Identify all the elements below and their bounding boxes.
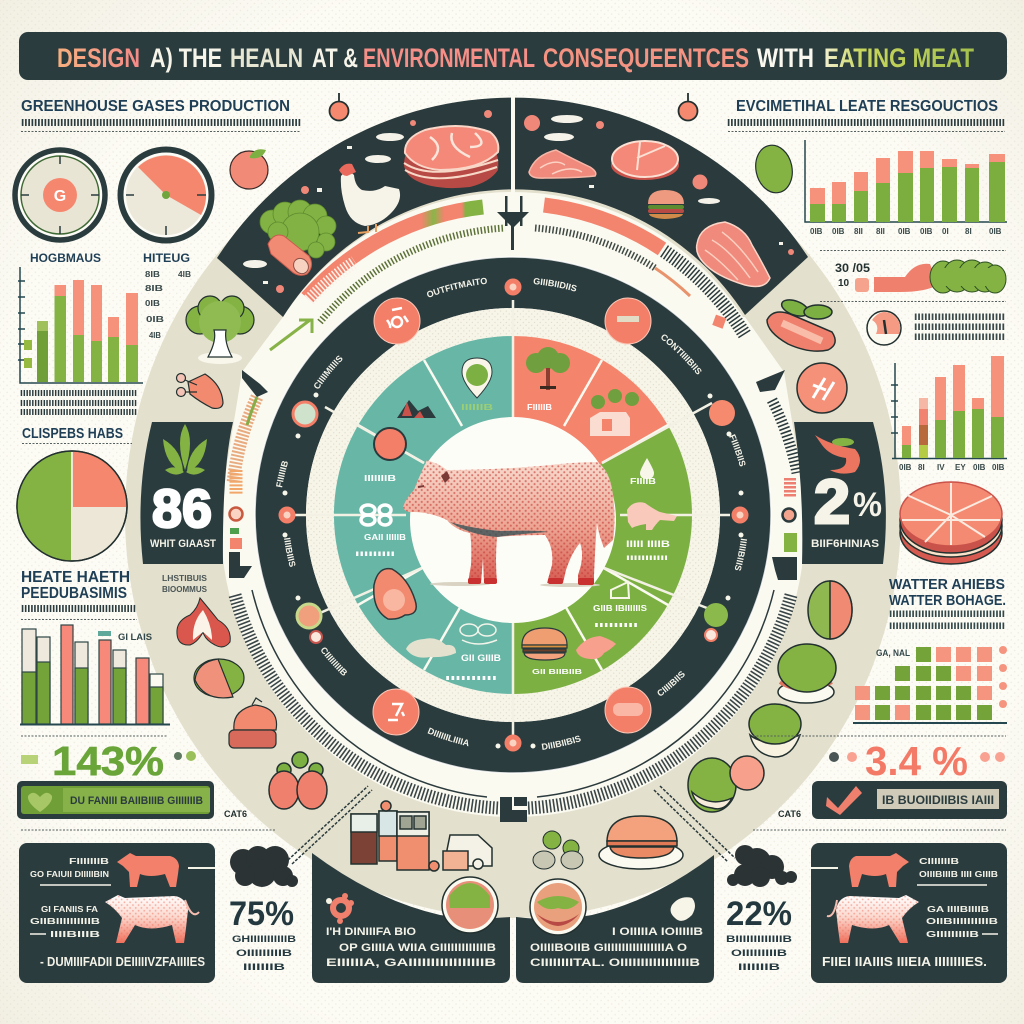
icon: large salmon cut <box>697 222 770 286</box>
ring curved labels: GIIIBIIDIIS <box>534 278 577 292</box>
bar chart: environmental: 0IB <box>898 227 911 236</box>
gauge left: G <box>54 188 66 205</box>
pie chart <box>16 451 127 561</box>
callout: green bar: DU FANIII BAIIBIIIB GIIIIIIIB <box>70 795 203 807</box>
wedge labels <box>355 403 671 682</box>
icon: map pin <box>462 358 492 398</box>
bar chart: foodmaus <box>18 267 143 383</box>
ring curved labels: IIIIIBIIIS <box>735 538 747 571</box>
ring curved labels: OUTFITMAITO <box>427 278 487 298</box>
icon: bottles and cartons <box>351 801 439 871</box>
icon: flames <box>177 598 230 647</box>
stat column: 75%: 75% <box>229 895 294 933</box>
ring curved labels: DIIIBIIBIS <box>542 736 581 750</box>
icon: water drop <box>640 458 654 479</box>
heading: health <box>21 569 137 620</box>
wedge labels: IIIIIIIII <box>594 623 640 629</box>
title bar <box>19 32 1007 80</box>
panel: bottom centre left: EIIIIIIA, GAIIIIIIIIIIIIIIIIIB <box>326 957 496 969</box>
panel: bottom left cows <box>19 843 215 983</box>
cream ring <box>320 322 706 708</box>
wedge labels: GIIB IBIIIIIIS <box>593 604 648 613</box>
section: greenhouse gases production <box>21 98 301 132</box>
panel: bottom centre right: I OIIIIIA IOIIIIIB <box>612 926 703 938</box>
stat: 3.4%: 3.4 % <box>865 738 968 784</box>
icon: heart check <box>28 793 52 812</box>
bar chart: land <box>891 356 1007 472</box>
gauge left <box>15 150 105 240</box>
icon: green bean <box>751 142 797 196</box>
bar chart: land: 0IB <box>899 463 912 472</box>
heading: water: IIIIIIIIIIIIIIIIIIIIIIIIIIIIIIIIIIII <box>889 609 1005 619</box>
title bar: A) THE <box>150 43 222 73</box>
bar chart: health <box>20 625 170 724</box>
icon: half lettuce <box>808 581 852 639</box>
heading: health: IIIIIIIIIIIIIIIIIIIIIIIIIIIIIIIIIIIII <box>21 604 136 615</box>
wedge labels: GII GIIIB <box>461 653 502 663</box>
stat: 3.4% <box>829 738 1005 784</box>
icon: cow small <box>117 853 179 887</box>
chart label <box>98 631 152 642</box>
stat: 143%: 143% <box>52 738 164 784</box>
icon: marker pin left <box>330 93 348 120</box>
connector markers: left <box>229 370 268 578</box>
bar chart: environmental <box>805 140 1007 236</box>
panel: right stat 2%: 2 <box>814 468 850 537</box>
ring curved labels <box>276 278 747 750</box>
heading: environmental <box>727 98 1005 132</box>
dark ring <box>255 257 771 773</box>
stat column: 20%: BIIIIIIIIIIIIIB <box>726 934 793 944</box>
large ring nodes <box>373 298 651 735</box>
panel: bottom right cows: FIIEI IIAIIIS IIIEIA IIIIIIIIES. <box>822 954 987 969</box>
panel: bottom left cows: GO FAIUII DIIIIIBIN <box>30 870 109 879</box>
panel: bottom left cows: - DUMIIIFADII DEIIIIIVZFAIIIIES <box>40 954 205 969</box>
chart legend: 0IB <box>146 315 164 324</box>
heading: health: HEATE HAETH <box>21 569 130 586</box>
chart label: GI LAIS <box>118 632 152 642</box>
ring curved labels: CIIIIBIIS <box>658 671 685 696</box>
panel: bottom left cows: FIIIIIIIB <box>69 857 109 866</box>
panel: top dark arc band <box>217 95 808 317</box>
icon: hot dog <box>767 297 835 351</box>
title bar: WITH <box>757 43 814 73</box>
gauge labels: HOGBMAUS <box>30 251 101 265</box>
chart caption: IIIIIIIIIIIIIIIIIIIIIIIIIIIIIIIIIIIIIIIII <box>20 408 137 417</box>
panel: bottom centre right <box>516 855 714 983</box>
panel: bottom centre left: I'H DINIIIFA BIO <box>326 926 416 938</box>
wedge labels: GII BIIBIIB <box>532 669 582 676</box>
icon: outline food <box>460 624 497 644</box>
ring nodes <box>281 281 746 749</box>
icon: truck <box>443 835 492 870</box>
panel: right stat 2%: BIIF6HINIAS <box>811 538 879 550</box>
bar chart: land: 0IB <box>973 463 986 472</box>
small label above flames: BIOOMMUS <box>162 585 208 594</box>
ring curved labels: CIIIIIIIIIB <box>321 648 347 676</box>
panel: left stat 86: 86 <box>152 479 212 539</box>
chart: central wedge ring <box>295 300 730 735</box>
icon: dark smoke cloud <box>230 846 298 887</box>
inner white circle <box>410 417 616 623</box>
icon: leaf <box>163 424 207 475</box>
bar chart: environmental: 0IB <box>832 227 845 236</box>
wedge content: labels and icons <box>355 347 677 682</box>
icon: pattern knot <box>361 505 391 525</box>
bar chart: environmental: 0IB <box>920 227 933 236</box>
clouds and crumbs <box>243 115 783 284</box>
panel: bottom right cows: OIIIBIIIB IIII GIIIB <box>919 870 998 879</box>
icon: tomato and meat <box>229 698 277 748</box>
stat column: 20%: OIIIIIIIIIB <box>731 948 788 958</box>
icon: cow small <box>849 853 909 887</box>
icon: cow large <box>105 895 199 943</box>
outer hatched gauge rings <box>233 397 797 808</box>
heading: water <box>889 576 1006 631</box>
chart caption: IIIIIIIIIIIIIIIIIIIIIIIIIIIIIIIIIIIIIIIII <box>20 399 137 408</box>
heading: environmental: EVCIMETIHAL LEATE RESGOUCTIOS <box>736 98 998 115</box>
bar chart: environmental: 8I <box>965 227 972 236</box>
title bar: ENVIRONMENTAL <box>363 43 535 73</box>
icon: veggie pods <box>533 831 583 869</box>
icon: chicken <box>339 164 400 233</box>
panel: right stat 2% <box>794 422 886 564</box>
icon: large burger on plate <box>599 816 683 869</box>
axis nodes <box>281 281 746 749</box>
icon: cloud pile <box>406 638 456 658</box>
small label above flames: LHSTIBUIS <box>162 574 208 583</box>
icon: tree <box>526 347 570 390</box>
panel: bottom centre right: CIIIIIIIITAL. OIIIIIIIIIIIIIIIIIB <box>530 957 700 969</box>
gauge labels <box>30 251 190 265</box>
panel: bottom left cows: GIIBIIIIIIIIIIB <box>30 917 100 926</box>
wedge labels: IIIIIIIIII <box>445 676 499 682</box>
grid chart: water: GA, NAL <box>876 648 910 658</box>
callout: dark bar <box>812 781 1007 819</box>
text block: figure caption: IIIIIIIIIIIIIIIIIIIIIIIIIII <box>914 332 1005 342</box>
icon: check mark <box>826 786 862 815</box>
chart legend: 8IB <box>145 270 160 279</box>
bar chart: environmental: 0I <box>942 227 949 236</box>
icon: chicken thigh <box>374 569 416 619</box>
stat column: 75% <box>229 846 298 972</box>
beige backdrop circle <box>125 112 901 918</box>
icon: burger <box>522 628 567 660</box>
panel: left stat 86: WHIT GIAAST <box>150 538 216 550</box>
icon: half salad <box>194 659 244 698</box>
heading: environmental: IIIIIIIIIIIIIIIIIIIIIIIIIIIIIIIIIIIIIIIIIIIIIIIIIIIIIIIIIIIIIIIIIIIIIIIIIIIIIIIIIIIIII <box>727 118 1005 129</box>
panel: bottom right cows: CIIIIIIIB <box>919 857 959 866</box>
arrow: smoke connector left <box>288 786 372 864</box>
panel: bottom right cows: GIIIIIIIIIB <box>926 930 979 939</box>
icon: chili <box>815 435 860 474</box>
stat column: 75%: GHIIIIIIIIIIIB <box>232 934 297 944</box>
icon: steak stack <box>404 126 498 188</box>
stat column: 75%: OIIIIIIIIIB <box>236 948 293 958</box>
icon: tomatoes with leaf <box>269 752 327 809</box>
ring curved labels: CONTIIIIBIIS <box>661 334 702 374</box>
wedge labels: FIIIIB <box>630 477 656 486</box>
gauge labels: HITEUG <box>143 251 190 265</box>
bar chart: environmental: 8II <box>854 227 863 236</box>
icon: broccoli <box>186 296 254 364</box>
section: greenhouse gases production: IIIIIIIIIIIIIIIIIIIIIIIIIIIIIIIIIIIIIIIIIIIIIIIIIIIIIIIIIIIIIIIIIIIIIIIIIIIIIIIIIIIIII <box>21 118 301 129</box>
title bar: EATING MEAT <box>824 43 974 73</box>
stat column: 75%: IIIIIIIB <box>243 962 286 972</box>
panel: right stat 2%: % <box>853 486 882 524</box>
chart caption <box>20 389 137 417</box>
chart caption: IIIIIIIIIIIIIIIIIIIIIIIIIIIIIIIIIIIIIIIII <box>20 389 137 398</box>
small note: CAT6 <box>778 809 801 819</box>
icon: mountain of food <box>397 400 436 418</box>
icon: central arrow marker <box>497 196 529 250</box>
icon: salmon circle <box>797 363 847 413</box>
icon: meat slices <box>576 636 616 659</box>
ring white dots <box>282 392 744 748</box>
small note: CAT6 <box>224 809 247 819</box>
grid chart: water <box>853 646 1007 723</box>
icon: white splat <box>671 897 695 921</box>
panel: bottom centre left: OP GIIIIA WIIA GIIIIIIIIIIIIIB <box>339 942 496 954</box>
icon: upper-right square marker <box>712 315 726 329</box>
panel: bottom centre left <box>312 853 510 983</box>
text block: figure caption: IIIIIIIIIIIIIIIIIIIIIIIIIII <box>914 322 1005 332</box>
icon: lettuce on plate <box>778 644 836 703</box>
icon: apple <box>230 149 268 189</box>
wedge labels: IIIIIIIIIII <box>626 556 669 562</box>
chart legend: 4IB <box>178 270 191 279</box>
side food icons: right <box>533 142 852 869</box>
icon: lettuce on burger <box>749 704 801 757</box>
icon: small burger <box>648 190 684 219</box>
inner cream disc <box>221 192 805 817</box>
ring curved labels: DIIIIIILIIIIA <box>428 728 468 746</box>
icon: circle figure <box>867 311 901 345</box>
chart legend: 0IB <box>145 299 160 308</box>
arrow: smoke connector right <box>654 786 735 862</box>
bar chart: land: 8I <box>918 463 925 472</box>
icon: chicken legs <box>176 374 223 408</box>
icon: salmon slice <box>529 150 596 178</box>
bar chart: land: EY <box>955 463 966 472</box>
panel: bottom right cows <box>811 843 1007 983</box>
wedge labels: IIIIIIB <box>461 403 493 412</box>
wedge labels: FIIIIIB <box>527 403 552 412</box>
icon: gear <box>326 893 354 924</box>
title bar: AT & <box>312 43 358 73</box>
top food icons <box>243 110 794 293</box>
centre bottom marker <box>500 797 527 822</box>
wedge labels: IIIIIIIII <box>355 552 396 558</box>
stat column: 20%: IIIIIIIB <box>738 962 781 972</box>
panel: bottom right cows: OIIBIIIIIIIIIIB <box>926 917 998 926</box>
icon: cow large <box>827 895 919 943</box>
icon: sliced ham stack <box>900 482 1002 564</box>
callout: sausage stat: 10 <box>838 278 850 289</box>
bar chart: land: 0IB <box>992 463 1005 472</box>
panel: bottom right cows: GA IIIIBIIIIB <box>927 905 989 914</box>
callout: sausage stat <box>820 250 1006 302</box>
icon: lettuce with meatball <box>688 756 764 812</box>
section: greenhouse gases production: GREENHOUSE GASES PRODUCTION <box>21 98 290 115</box>
icon: food bowl <box>442 877 498 933</box>
stat: 143% <box>21 736 1006 830</box>
icon: marker pin right <box>678 93 698 120</box>
connector markers: right <box>756 370 797 580</box>
wedge labels: IIIII IIIIB <box>626 539 671 549</box>
gauge right <box>120 150 212 240</box>
icon: dark smoke cloud <box>727 845 797 887</box>
bar chart: environmental: 8II <box>876 227 885 236</box>
small nodes <box>293 402 317 426</box>
ring curved labels: CIIIIMIIIIS <box>314 356 342 389</box>
panel: left stat 86 <box>140 422 233 564</box>
heading: health: PEEDUBASIMIS <box>21 585 127 602</box>
heading: water: WATTER BOHAGE. <box>889 592 1006 609</box>
bar chart: environmental: 0IB <box>989 227 1002 236</box>
icon: meat cut <box>627 502 677 530</box>
chart legend: 4IB <box>149 331 161 340</box>
panel: bottom left cows: IIIIBIIIB <box>50 930 100 939</box>
icon: pig <box>403 460 614 587</box>
text block: figure caption: IIIIIIIIIIIIIIIIIIIIIIIIIII <box>914 312 1005 322</box>
ring curved labels: IIIIBIIIS <box>284 538 296 567</box>
icon: cake slice <box>611 582 629 598</box>
text block: figure caption <box>914 312 1005 342</box>
icon: steak <box>611 141 679 180</box>
icon: barn <box>590 389 639 436</box>
ring curved labels: FIIIIBIIS <box>729 434 746 466</box>
chart legend <box>145 270 191 340</box>
bar chart: land: IV <box>937 463 945 472</box>
icon: lettuce with roll <box>260 200 336 277</box>
stat column: 20% <box>726 845 797 972</box>
panel: bottom centre right: OIIIIBOIIB GIIIIIIIIIIIIIIIIIA O <box>530 942 688 954</box>
heading: water: IIIIIIIIIIIIIIIIIIIIIIIIIIIIIIIIIIII <box>889 621 1005 631</box>
callout: dark bar: IB BUOIIDIIBIS IAIII <box>882 793 994 807</box>
wedge labels: IIIIIIIB <box>364 474 396 483</box>
callout: sausage stat: 30 /05 <box>835 261 870 275</box>
heading: pie: CLISPEBS HABS <box>22 425 123 442</box>
icon: burger bowl <box>530 879 586 935</box>
stat column: 20%: 22% <box>726 895 792 933</box>
side food icons: left <box>176 296 492 871</box>
ring curved labels: FIIIIIIB <box>276 461 288 488</box>
bar chart: environmental: 0IB <box>810 227 823 236</box>
small label above flames <box>162 574 208 594</box>
title bar: CONSEQUEENTCES <box>543 43 749 73</box>
chart legend: 8IB <box>145 284 163 293</box>
heading: water: WATTER AHIEBS <box>889 576 1005 593</box>
callout: green bar <box>17 781 214 819</box>
panel: bottom left cows: GI FANIIS FA <box>41 905 98 914</box>
wedge labels: GAII IIIIIB <box>364 533 406 542</box>
arc gauge bar <box>270 205 745 350</box>
title bar: HEALN <box>230 43 303 73</box>
title bar: DESIGN <box>57 43 140 73</box>
